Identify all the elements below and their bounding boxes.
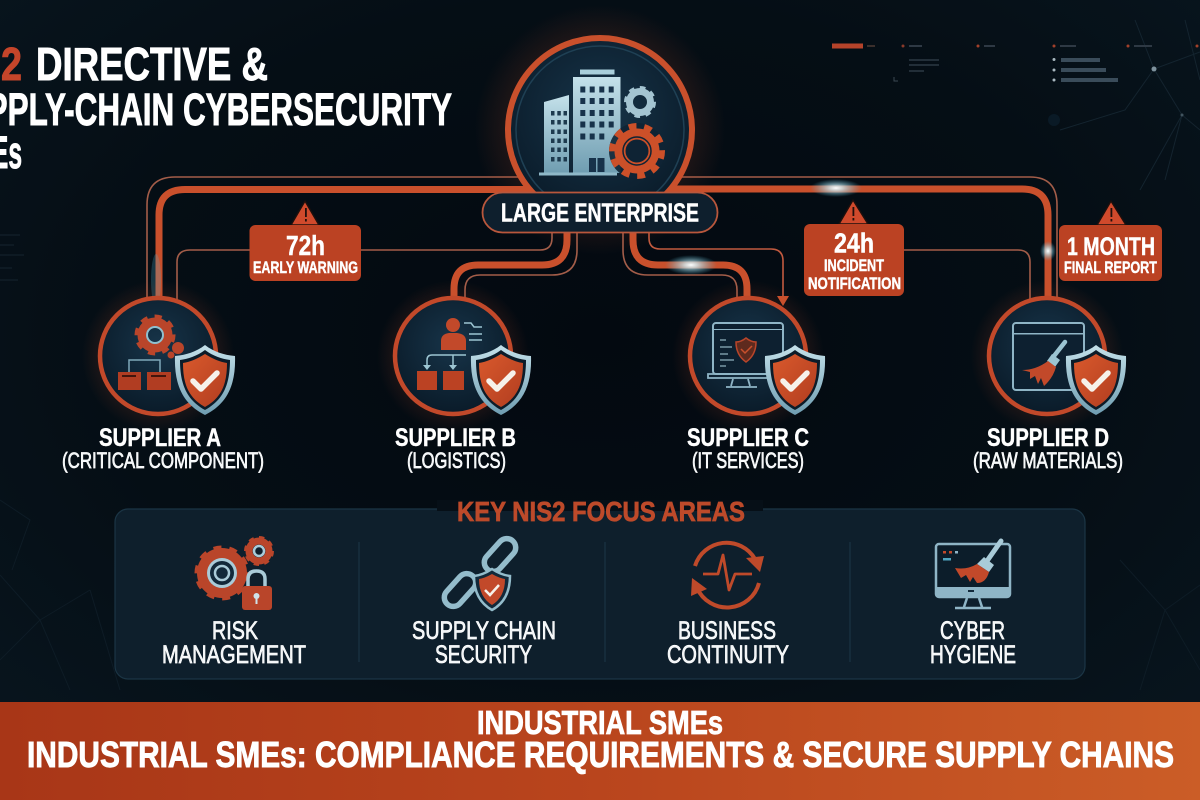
node circle (690, 298, 806, 414)
decorative network: top right (1048, 20, 1200, 190)
line from 24h badge (904, 250, 1030, 300)
icon: buildings and gears (539, 70, 665, 179)
supplier D role: (RAW MATERIALS) (973, 448, 1123, 473)
icon: small gear (626, 88, 654, 116)
trunk left (159, 190, 535, 300)
icon: large gear (609, 123, 665, 179)
decorative data readout: top right (832, 44, 1198, 82)
supplier C role: (IT SERVICES) (692, 448, 804, 473)
supplier D (971, 280, 1126, 473)
title line 1: Directive: DIRECTIVE & (36, 38, 268, 90)
supplier C (672, 280, 825, 473)
shield badge (471, 345, 531, 415)
label: SUPPLY CHAIN (412, 617, 556, 645)
label: MANAGEMENT (162, 641, 306, 669)
node circle (395, 298, 511, 414)
footer line 1: INDUSTRIAL SMEs (477, 704, 723, 741)
focus: supply chain security (412, 535, 556, 669)
icon: gear and components (118, 318, 184, 390)
badge: 72h early warning: 72h (286, 230, 325, 261)
icon: laptop with code (708, 323, 783, 387)
badge: 72h early warning: EARLY WARNING (253, 258, 358, 277)
badge: 24h incident notification (804, 200, 904, 296)
shield badge (1066, 345, 1126, 415)
shield badge (765, 345, 825, 415)
icon: chain and shield (441, 535, 519, 610)
label: BUSINESS (678, 617, 776, 645)
icon: gears and lock (198, 538, 272, 610)
branch to supplier C (633, 230, 747, 300)
supplier A role: (CRITICAL COMPONENT) (62, 448, 264, 473)
supplier A name: SUPPLIER A (99, 424, 221, 452)
badge: 24h incident notification: NOTIFICATION (808, 275, 901, 293)
badge: 1 month final report (1059, 201, 1162, 281)
focus: business continuity (667, 543, 789, 669)
badge: 1 month final report: 1 MONTH (1067, 233, 1155, 261)
footer banner (0, 702, 1200, 800)
icon: cycle arrows and pulse (691, 543, 764, 608)
glow sparks (151, 179, 1056, 306)
branch to supplier B (454, 230, 567, 300)
icon: monitor and brush (936, 541, 1010, 608)
badge: 1 month final report: FINAL REPORT (1064, 258, 1157, 277)
title (0, 38, 452, 178)
icon: browser window and brush (1013, 323, 1084, 390)
trunk right (665, 189, 1048, 300)
label: SECURITY (435, 641, 532, 669)
line through 72h badge (177, 230, 552, 300)
panel: key NIS2 focus areas (115, 496, 1085, 679)
connector network (147, 177, 1057, 306)
arrow to supplier C (649, 230, 789, 306)
focus: risk management (162, 538, 306, 669)
node circle (100, 298, 216, 414)
focus: cyber hygiene (930, 541, 1016, 669)
shield badge (175, 345, 235, 415)
supplier B name: SUPPLIER B (395, 424, 516, 452)
large enterprise node (475, 5, 725, 255)
supplier D name: SUPPLIER D (987, 424, 1109, 452)
badge: 72h early warning (250, 201, 361, 281)
main circle (508, 38, 692, 222)
label: CYBER (940, 617, 1005, 645)
label: RISK (212, 617, 258, 645)
supplier C name: SUPPLIER C (687, 424, 809, 452)
panel heading: KEY NIS2 FOCUS AREAS (457, 496, 745, 527)
supplier B (377, 280, 531, 473)
decorative network: left and bottom (0, 235, 1200, 690)
label pill: LARGE ENTERPRISE (501, 200, 699, 228)
badge: 24h incident notification: 24h (834, 228, 874, 258)
node circle (989, 298, 1105, 414)
label: CONTINUITY (667, 641, 789, 669)
badge: 24h incident notification: INCIDENT (824, 257, 884, 275)
supplier B role: (LOGISTICS) (407, 448, 506, 473)
label pill (482, 192, 718, 232)
label: HYGIENE (930, 641, 1016, 669)
supplier A (62, 280, 264, 473)
icon: person and flow (417, 318, 482, 390)
